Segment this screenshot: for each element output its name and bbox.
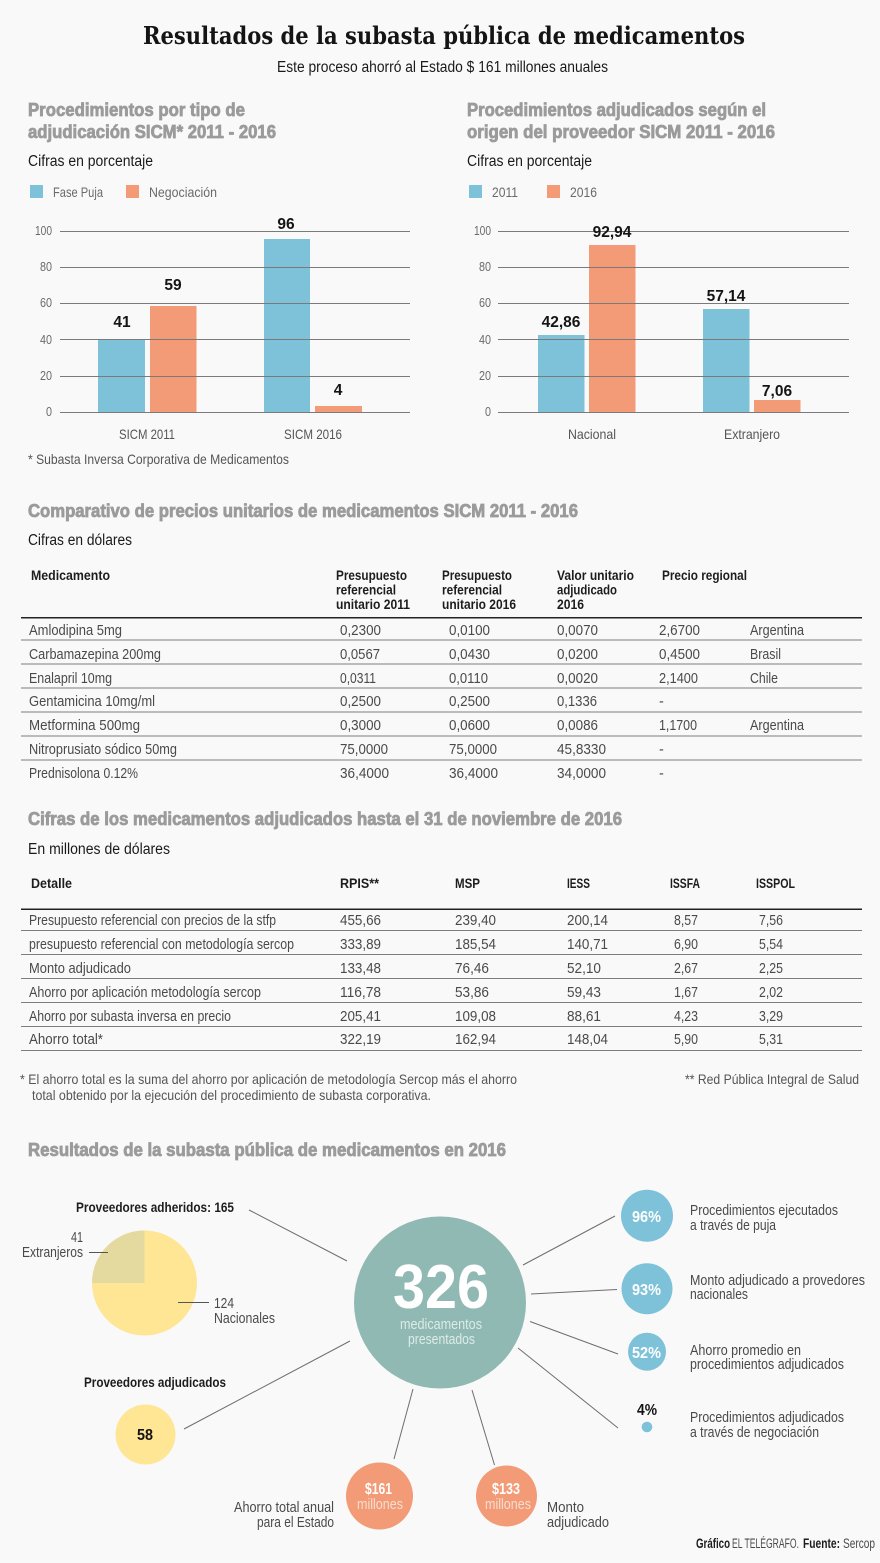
row: Gentamicina: - xyxy=(659,694,664,710)
bar chart: origen del proveedor: 100 xyxy=(474,223,491,238)
heading: tipo de adjudicación: adjudicación SICM* 2011 - 2016 xyxy=(28,122,276,142)
circle: 93% proveedores nacionales xyxy=(622,1263,865,1314)
central circle: 326 medicamentos: presentados xyxy=(408,1332,475,1348)
heading: tipo de adjudicación xyxy=(28,100,276,142)
circle: 4% negociación: a través de negociación xyxy=(690,1425,819,1441)
row: monto adjudicado: 52,10 xyxy=(567,961,601,977)
legend: Negociación xyxy=(149,184,217,200)
row: Nitroprusiato: 75,0000 xyxy=(449,742,497,758)
table: medicamentos adjudicados xyxy=(21,875,862,1050)
circle: 96% puja: a través de puja xyxy=(690,1218,777,1234)
row: Gentamicina: 0,2500 xyxy=(340,694,381,710)
credits: EL TELÉGRAFO. xyxy=(732,1536,799,1551)
panel: comparativo de precios xyxy=(21,501,862,782)
circle: 96% puja: Procedimientos ejecutados xyxy=(690,1203,838,1219)
row: monto adjudicado: 2,25 xyxy=(759,961,783,977)
legend: 2011 xyxy=(492,184,518,200)
row: Prednisolona: Prednisolona 0.12% xyxy=(29,766,138,782)
bar chart: origen del proveedor: 80 xyxy=(479,259,491,274)
table header: IESS xyxy=(567,875,590,891)
bar chart: tipo de adjudicación xyxy=(35,216,410,442)
pie chart: proveedores adheridos xyxy=(22,1199,275,1336)
unit note: Cifras en dólares xyxy=(28,532,132,549)
circle: ahorro total anual: $161 xyxy=(365,1481,392,1498)
bar chart: origen del proveedor: 42,86 xyxy=(542,314,581,331)
bar chart: tipo de adjudicación: 4 xyxy=(334,382,343,399)
row: Nitroprusiato: - xyxy=(659,742,664,758)
footnote: ahorro total xyxy=(20,1071,517,1103)
circle: monto adjudicado: $133 xyxy=(492,1481,520,1498)
row: Amlodipina: 0,0100 xyxy=(449,623,490,639)
row: Carbamazepina: 0,0200 xyxy=(557,647,598,663)
circle: 4% negociación xyxy=(637,1402,844,1441)
circle: proveedores adjudicados xyxy=(84,1374,226,1464)
row: ahorro subasta: 88,61 xyxy=(567,1009,601,1025)
legend: Fase Puja xyxy=(53,184,103,200)
heading: tipo de adjudicación: Procedimientos por tipo de xyxy=(28,100,245,120)
pie chart: proveedores adheridos: Extranjeros xyxy=(22,1245,83,1261)
row: Metformina: 0,0086 xyxy=(557,718,598,734)
circle: 52% ahorro promedio: Ahorro promedio en xyxy=(690,1343,801,1359)
row: ahorro total: 5,31 xyxy=(759,1032,783,1048)
row: ahorro total: 148,04 xyxy=(567,1032,608,1048)
row: Carbamazepina: Carbamazepina 200mg xyxy=(29,647,161,663)
row: ahorro metodología: Ahorro por aplicación metodología sercop xyxy=(29,985,261,1001)
row: presupuesto stfp: 7,56 xyxy=(759,913,783,929)
bar chart: tipo de adjudicación: 0 xyxy=(46,404,52,419)
footnote: ahorro total: total obtenido por la ejecución del procedimiento de subasta corporativa. xyxy=(32,1087,431,1103)
row: Enalapril: 0,0311 xyxy=(340,671,376,687)
bar chart: origen del proveedor: 20 xyxy=(479,368,491,383)
row: Nitroprusiato: 45,8330 xyxy=(557,742,606,758)
central circle: 326 medicamentos: medicamentos xyxy=(400,1317,482,1333)
bar chart: tipo de adjudicación: 41 xyxy=(113,314,131,331)
row: Metformina: 0,3000 xyxy=(340,718,381,734)
row: ahorro subasta: 3,29 xyxy=(759,1009,783,1025)
heading: origen del proveedor: Procedimientos adjudicados según el xyxy=(467,100,766,120)
bar chart: origen del proveedor: 0 xyxy=(485,404,491,419)
table header: Valor unitario xyxy=(557,567,634,583)
row: monto adjudicado xyxy=(29,961,783,977)
circle: ahorro total anual: para el Estado xyxy=(257,1515,334,1531)
table header: Detalle xyxy=(31,875,72,891)
table: precios unitarios xyxy=(21,567,862,782)
table header: adjudicado xyxy=(557,582,617,598)
circle: ahorro total anual: millones xyxy=(357,1497,403,1513)
row: presupuesto sercop: presupuesto referencial con metodología sercop xyxy=(29,937,294,953)
heading: origen del proveedor xyxy=(467,100,775,142)
row: ahorro metodología: 2,02 xyxy=(759,985,783,1001)
table header: referencial xyxy=(336,582,396,598)
row: Amlodipina: 2,6700 xyxy=(659,623,700,639)
bar chart: origen del proveedor: 7,06 xyxy=(762,383,792,400)
row: presupuesto sercop: 5,54 xyxy=(759,937,783,953)
row: Amlodipina xyxy=(29,623,805,639)
central circle: 326 medicamentos xyxy=(354,1216,526,1388)
subtitle: Este proceso ahorró al Estado $ 161 millones anuales xyxy=(277,59,608,76)
bar chart: tipo de adjudicación: SICM 2016 xyxy=(284,426,342,442)
bar chart: origen del proveedor: Nacional xyxy=(568,426,616,442)
row: Amlodipina: Argentina xyxy=(750,623,805,639)
circle: 52% ahorro promedio: 52% xyxy=(632,1345,661,1362)
credits: Gráfico xyxy=(696,1535,730,1551)
row: presupuesto stfp xyxy=(29,913,783,929)
panel: procedimientos por tipo de adjudicación xyxy=(28,100,410,467)
bar chart: origen del proveedor: 40 xyxy=(479,332,491,347)
row: presupuesto sercop: 185,54 xyxy=(455,937,496,953)
row: Prednisolona xyxy=(29,766,664,782)
bar chart: origen del proveedor: 60 xyxy=(479,295,491,310)
bar chart: tipo de adjudicación: 59 xyxy=(164,277,182,294)
pie chart: proveedores adheridos: Proveedores adheridos: 165 xyxy=(76,1199,234,1215)
table header: Presupuesto xyxy=(336,567,407,583)
bar chart: tipo de adjudicación: SICM 2011 xyxy=(119,426,175,442)
bar chart: tipo de adjudicación: 80 xyxy=(40,259,52,274)
table header xyxy=(31,567,747,612)
bar chart: origen del proveedor: 92,94 xyxy=(593,224,632,241)
row: monto adjudicado: 133,48 xyxy=(340,961,381,977)
row: Enalapril: 0,0020 xyxy=(557,671,598,687)
row: Carbamazepina: 0,0430 xyxy=(449,647,490,663)
panel: cifras de medicamentos adjudicados xyxy=(20,809,862,1103)
row: ahorro total: 322,19 xyxy=(340,1032,381,1048)
unit note: En millones de dólares xyxy=(28,841,170,858)
row: Amlodipina: Amlodipina 5mg xyxy=(29,623,122,639)
bar chart: origen del proveedor: 57,14 xyxy=(707,288,746,305)
legend xyxy=(469,184,597,200)
row: ahorro total: Ahorro total* xyxy=(29,1032,103,1048)
row: ahorro subasta: 4,23 xyxy=(674,1009,698,1025)
row: ahorro subasta: 109,08 xyxy=(455,1009,496,1025)
circle: monto adjudicado: millones xyxy=(485,1497,531,1513)
pie chart: proveedores adheridos: 124 xyxy=(214,1296,234,1312)
circle: proveedores adjudicados: Proveedores adjudicados xyxy=(84,1374,226,1390)
circle: proveedores adjudicados: 58 xyxy=(137,1427,153,1444)
row: Prednisolona: 36,4000 xyxy=(340,766,389,782)
circle: 96% puja xyxy=(621,1190,838,1242)
row: ahorro metodología: 116,78 xyxy=(340,985,381,1001)
row: Nitroprusiato xyxy=(29,742,664,758)
circle: ahorro total anual xyxy=(234,1462,413,1531)
row: Enalapril: 0,0110 xyxy=(449,671,488,687)
table header: unitario 2011 xyxy=(336,596,410,612)
row: ahorro metodología: 59,43 xyxy=(567,985,601,1001)
table header: Presupuesto xyxy=(442,567,512,583)
unit note: Cifras en porcentaje xyxy=(467,153,592,170)
row: Amlodipina: 0,0070 xyxy=(557,623,598,639)
row: Gentamicina: 0,2500 xyxy=(449,694,490,710)
credits: Fuente: xyxy=(803,1535,840,1551)
row: presupuesto stfp: 239,40 xyxy=(455,913,496,929)
row: Carbamazepina: 0,4500 xyxy=(659,647,700,663)
table header: Medicamento xyxy=(31,567,110,583)
table header: RPIS** xyxy=(340,875,379,891)
row: presupuesto stfp: 455,66 xyxy=(340,913,381,929)
row: Prednisolona: 34,0000 xyxy=(557,766,606,782)
row: Metformina: Metformina 500mg xyxy=(29,718,140,734)
table header: unitario 2016 xyxy=(442,596,516,612)
row: ahorro total: 162,94 xyxy=(455,1032,496,1048)
legend: 2016 xyxy=(570,184,597,200)
circle: monto adjudicado: Monto xyxy=(547,1500,584,1516)
bar chart: tipo de adjudicación: 60 xyxy=(40,295,52,310)
row: ahorro total xyxy=(29,1032,783,1048)
legend xyxy=(30,184,217,200)
row: presupuesto sercop: 333,89 xyxy=(340,937,381,953)
bar chart: tipo de adjudicación: 96 xyxy=(277,216,295,233)
title: Resultados de la subasta pública de medicamentos xyxy=(143,21,745,50)
row: Enalapril xyxy=(29,671,778,687)
circle: ahorro total anual: Ahorro total anual xyxy=(234,1500,334,1516)
table header: referencial xyxy=(442,582,502,598)
bar chart: tipo de adjudicación: 20 xyxy=(40,368,52,383)
row: monto adjudicado: Monto adjudicado xyxy=(29,961,131,977)
footnote: RPIS: ** Red Pública Integral de Salud xyxy=(685,1071,859,1087)
table header: Precio regional xyxy=(662,567,747,583)
row: Metformina: Argentina xyxy=(750,718,805,734)
row: presupuesto stfp: 200,14 xyxy=(567,913,608,929)
pie chart: proveedores adheridos: Nacionales xyxy=(214,1311,275,1327)
bar chart: origen del proveedor xyxy=(474,223,849,442)
row: presupuesto stfp: Presupuesto referencial con precios de la stfp xyxy=(29,913,276,929)
row: Metformina: 0,0600 xyxy=(449,718,490,734)
row: ahorro metodología: 1,67 xyxy=(674,985,698,1001)
panel: resultados 2016 xyxy=(22,1140,865,1531)
row: presupuesto sercop: 6,90 xyxy=(674,937,698,953)
row: ahorro metodología xyxy=(29,985,783,1001)
heading: comparativo de precios: Comparativo de precios unitarios de medicamentos SICM 2011 - 2016 xyxy=(28,501,578,521)
row: Carbamazepina: 0,0567 xyxy=(340,647,380,663)
row: presupuesto stfp: 8,57 xyxy=(674,913,698,929)
row: presupuesto sercop xyxy=(29,937,783,953)
circle: 93% proveedores nacionales: 93% xyxy=(632,1282,661,1299)
row: Carbamazepina xyxy=(29,647,781,663)
panel: origen del proveedor xyxy=(467,100,849,442)
row: ahorro subasta: Ahorro por subasta inversa en precio xyxy=(29,1009,231,1025)
row: Prednisolona: - xyxy=(659,766,664,782)
row: Enalapril: Chile xyxy=(750,671,778,687)
circle: 93% proveedores nacionales: nacionales xyxy=(690,1287,748,1303)
heading: cifras adjudicados: Cifras de los medicamentos adjudicados hasta el 31 de noviembre de 2016 xyxy=(28,809,622,829)
row: monto adjudicado: 76,46 xyxy=(455,961,489,977)
row: Nitroprusiato: Nitroprusiato sódico 50mg xyxy=(29,742,177,758)
row: Nitroprusiato: 75,0000 xyxy=(340,742,388,758)
row: Metformina: 1,1700 xyxy=(659,718,697,734)
circle: monto adjudicado xyxy=(476,1466,609,1531)
central circle: 326 medicamentos: 326 xyxy=(393,1253,489,1322)
bar chart: tipo de adjudicación: 100 xyxy=(35,223,52,238)
footnote: SICM: * Subasta Inversa Corporativa de Medicamentos xyxy=(28,451,289,467)
row: ahorro metodología: 53,86 xyxy=(455,985,489,1001)
pie chart: proveedores adheridos: 41 xyxy=(71,1230,83,1246)
connector lines xyxy=(184,1210,618,1465)
circle: monto adjudicado: adjudicado xyxy=(547,1515,609,1531)
heading: resultados 2016: Resultados de la subasta pública de medicamentos en 2016 xyxy=(28,1140,506,1160)
circle: 52% ahorro promedio: procedimientos adjudicados xyxy=(690,1357,844,1373)
circle: 96% puja: 96% xyxy=(632,1209,661,1226)
footnote: ahorro total: * El ahorro total es la suma del ahorro por aplicación de metodología Sercop más el ahorro xyxy=(20,1071,517,1087)
row: Prednisolona: 36,4000 xyxy=(449,766,498,782)
row: Gentamicina xyxy=(29,694,664,710)
credits xyxy=(696,1535,875,1551)
bar chart: tipo de adjudicación: 40 xyxy=(40,332,52,347)
row: monto adjudicado: 2,67 xyxy=(674,961,698,977)
row: Carbamazepina: Brasil xyxy=(750,647,781,663)
circle: 52% ahorro promedio xyxy=(628,1333,844,1373)
row: ahorro subasta: 205,41 xyxy=(340,1009,381,1025)
circle: 4% negociación: Procedimientos adjudicados xyxy=(690,1410,844,1426)
circle: 4% negociación: 4% xyxy=(637,1402,657,1419)
row: Amlodipina: 0,2300 xyxy=(340,623,381,639)
table header xyxy=(31,875,795,891)
bar chart: origen del proveedor: Extranjero xyxy=(724,426,780,442)
table header: ISSFA xyxy=(670,875,700,891)
row: Enalapril: Enalapril 10mg xyxy=(29,671,112,687)
row: ahorro total: 5,90 xyxy=(674,1032,698,1048)
table header: MSP xyxy=(455,875,480,891)
unit note: Cifras en porcentaje xyxy=(28,153,153,170)
row: Gentamicina: 0,1336 xyxy=(557,694,597,710)
row: presupuesto sercop: 140,71 xyxy=(567,937,608,953)
row: Gentamicina: Gentamicina 10mg/ml xyxy=(29,694,155,710)
heading: origen del proveedor: origen del proveedor SICM 2011 - 2016 xyxy=(467,122,775,142)
row: Enalapril: 2,1400 xyxy=(659,671,698,687)
row: Metformina xyxy=(29,718,805,734)
table header: ISSPOL xyxy=(756,875,795,891)
row: ahorro subasta xyxy=(29,1009,783,1025)
table header: 2016 xyxy=(557,596,584,612)
